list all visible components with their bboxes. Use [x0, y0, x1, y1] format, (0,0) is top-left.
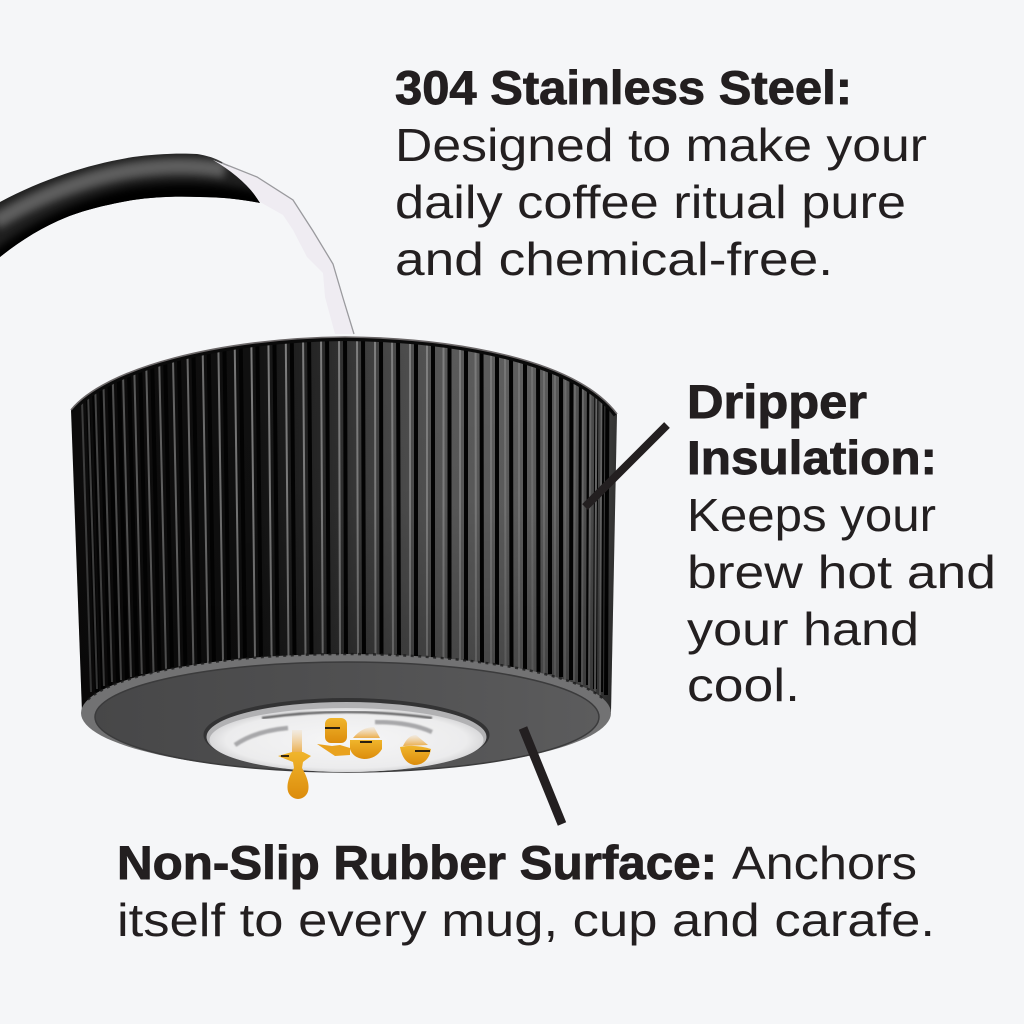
- callout: 304 stainless steel: Designed to make your: [395, 119, 927, 171]
- water edge: [222, 163, 354, 334]
- callout: dripper insulation: Keeps your: [687, 489, 936, 541]
- callout: 304 stainless steel: [395, 61, 927, 285]
- callout: non-slip rubber surface: [117, 836, 935, 946]
- callout: dripper insulation: your hand: [687, 603, 919, 655]
- rubber base rim: [81, 654, 611, 772]
- water stream: [213, 160, 354, 334]
- callout: dripper insulation: cool.: [687, 659, 800, 711]
- ribbed insulation body: [65, 330, 625, 720]
- top edge highlight: [71, 337, 617, 414]
- callout: non-slip rubber surface: Anchors: [732, 837, 917, 889]
- dripper product: [65, 330, 625, 799]
- coffee drops: [278, 718, 431, 799]
- upper drop: [317, 718, 350, 756]
- falling drop: [278, 730, 311, 799]
- scalloped rim teeth: [88, 654, 604, 700]
- callout: 304 stainless steel: and chemical-free.: [395, 233, 833, 285]
- callout: dripper insulation: [687, 375, 996, 711]
- callout: 304 stainless steel: daily coffee ritual pure: [395, 176, 906, 228]
- kettle spout pouring water: [0, 145, 354, 334]
- middle drop: [350, 727, 382, 759]
- callout: dripper insulation: Dripper: [687, 375, 867, 428]
- right drop: [400, 735, 431, 765]
- rubber base surface: [95, 662, 599, 772]
- leader line: rubber surface: [523, 728, 562, 824]
- callout: non-slip rubber surface: itself to every mug, cup and carafe.: [117, 894, 935, 946]
- callout: 304 stainless steel: 304 Stainless Steel:: [395, 61, 852, 114]
- spout: [0, 154, 260, 257]
- leader line: insulation: [585, 425, 667, 507]
- callout: dripper insulation: Insulation:: [687, 431, 937, 484]
- steel drip plate: [204, 698, 490, 772]
- callout: non-slip rubber surface: Non-Slip Rubber Surface:: [117, 836, 717, 889]
- callout: dripper insulation: brew hot and: [687, 546, 996, 598]
